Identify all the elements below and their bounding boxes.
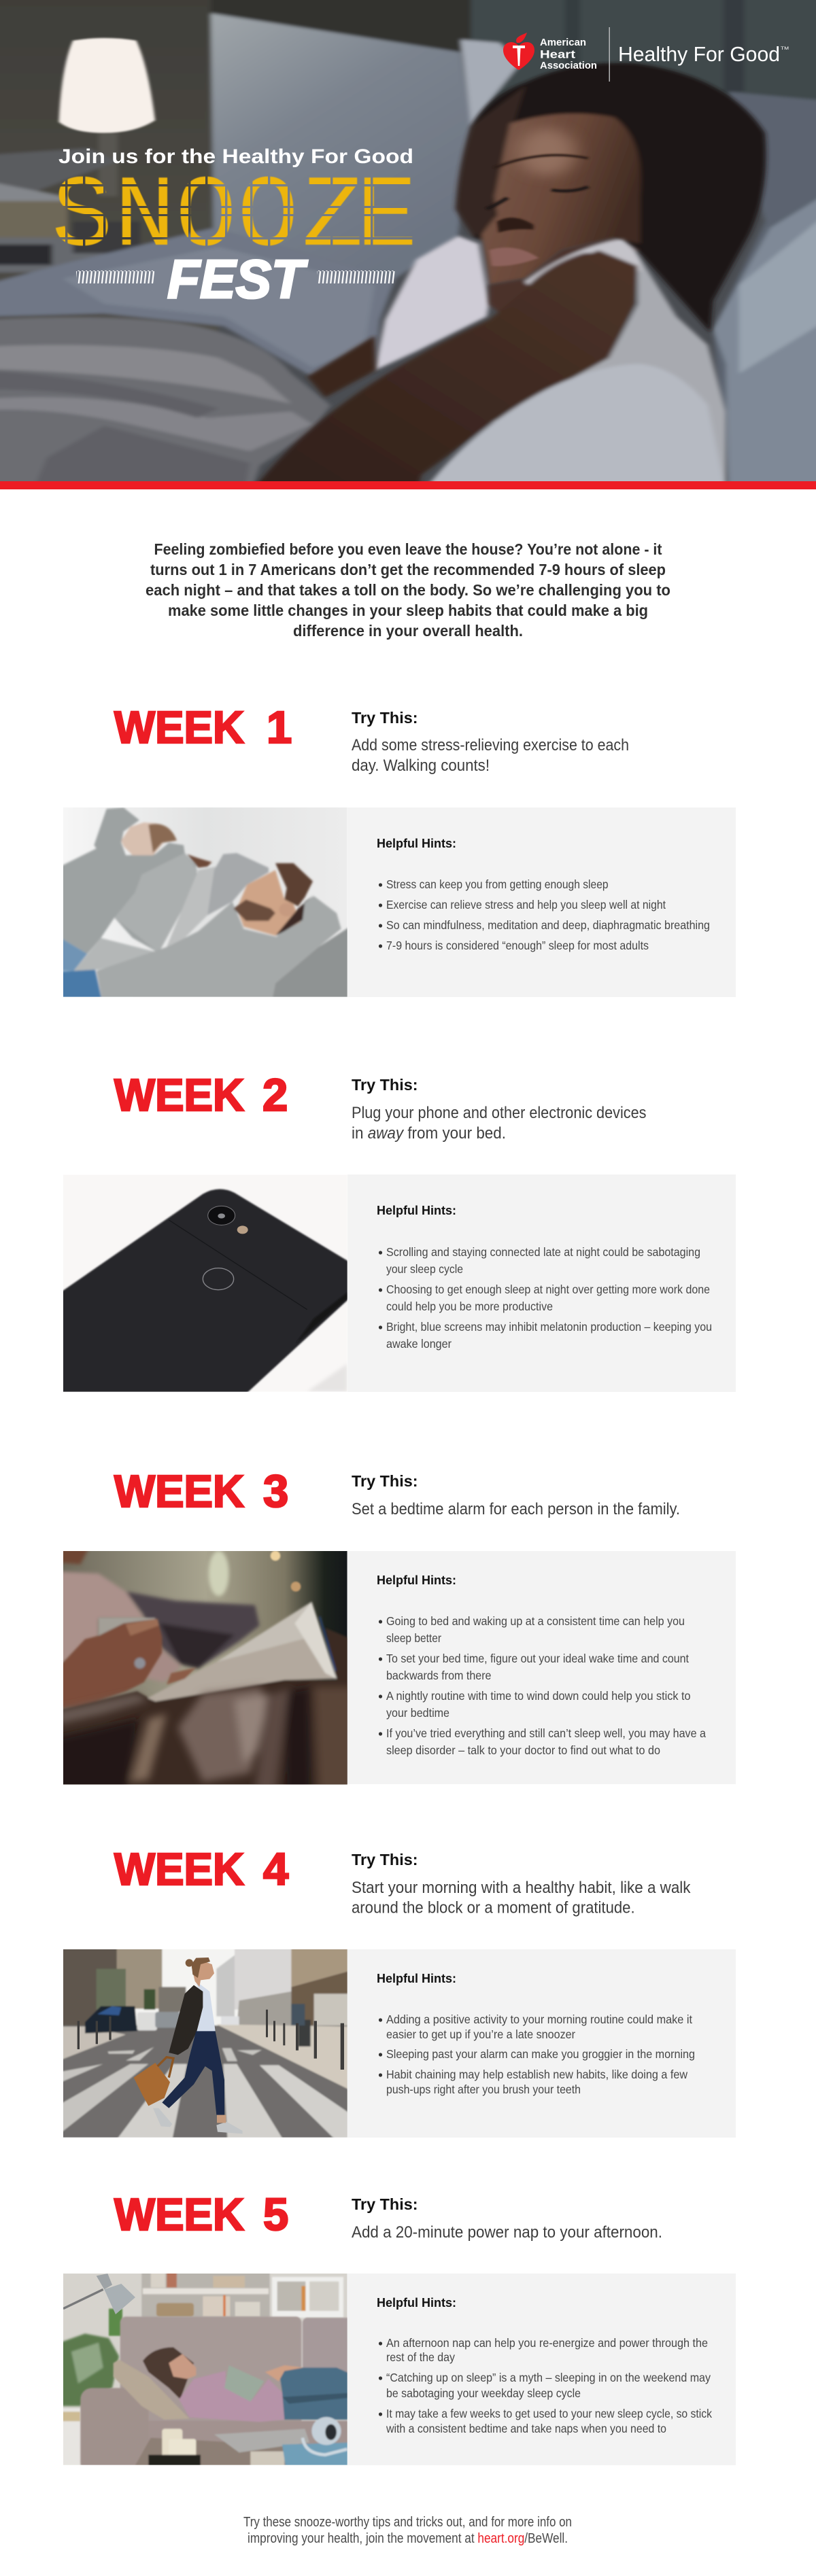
week 4 heading: WEEK: [114, 1844, 244, 1895]
hero banner: [0, 0, 816, 494]
tick bar left: [76, 271, 154, 283]
week 2 try this: in away from your bed.: [352, 1124, 506, 1143]
hero photo: woman sleeping in bed: [0, 0, 816, 494]
week 5 hints: [377, 2296, 712, 2435]
flash: [237, 1225, 248, 1234]
week 5 section: [53, 2189, 736, 2474]
week 3 section: [53, 1466, 736, 1793]
closing call to action: [243, 2515, 572, 2546]
week 2 heading: 2: [262, 1070, 288, 1121]
red band: [0, 481, 816, 489]
week 3 try this: Try This:: [352, 1472, 418, 1490]
week 4 try this: around the block or a moment of gratitude.: [352, 1899, 635, 1917]
week 5 photo: woman napping on a sofa: [63, 2274, 347, 2465]
week 2 hints: Scrolling and staying connected late at night could be sabotaging: [386, 1245, 700, 1259]
week 4 hints: Helpful Hints:: [377, 1972, 456, 1985]
week 4 photo: woman walking across a crosswalk: [63, 1949, 347, 2138]
intro paragraph: Feeling zombiefied before you even leave the house? You’re not alone - it: [154, 540, 662, 558]
week 5 hints panel: [347, 2274, 736, 2465]
week 3 hints: To set your bed time, figure out your ideal wake time and count: [386, 1652, 689, 1665]
week 1 hints: 7-9 hours is considered “enough” sleep for most adults: [386, 939, 649, 952]
tick bar right: [317, 271, 395, 283]
week 1 hints: Helpful Hints:: [377, 837, 456, 850]
camera: [208, 1206, 235, 1225]
week 4 section: [53, 1844, 736, 2148]
week 3 hints: sleep disorder – talk to your doctor to find out what to do: [386, 1743, 660, 1757]
week 3 hints panel: [347, 1551, 736, 1784]
week 5 try this: [352, 2195, 662, 2242]
week 1 try this: day. Walking counts!: [352, 756, 490, 775]
week 2 try this: [352, 1076, 646, 1143]
week 3 hints: A nightly routine with time to wind down could help you stick to: [386, 1689, 691, 1703]
week 2 hints: Bright, blue screens may inhibit melatonin production – keeping you: [386, 1320, 712, 1334]
closing call to action: Try these snooze-worthy tips and tricks out, and for more info on: [243, 2515, 572, 2530]
week 2 hints: could help you be more productive: [386, 1300, 553, 1313]
week 5 hints: “Catching up on sleep” is a myth – sleeping in on the weekend may: [386, 2371, 711, 2384]
week 3 hints: backwards from there: [386, 1669, 491, 1682]
week 3 hints: Going to bed and waking up at a consistent time can help you: [386, 1614, 685, 1628]
week 3 try this: Set a bedtime alarm for each person in the family.: [352, 1500, 680, 1518]
week 1 hints: Exercise can relieve stress and help you sleep well at night: [386, 898, 666, 911]
intro paragraph: turns out 1 in 7 Americans don’t get the recommended 7-9 hours of sleep: [150, 561, 666, 578]
SNOOZE clock-style title: SNOOZE: [52, 160, 418, 276]
week 3 photo: reading with a mug under a blanket: [63, 1551, 347, 1785]
week 5 heading: WEEK: [114, 2189, 244, 2240]
week 2 hints: your sleep cycle: [386, 1262, 463, 1276]
logo: Healthy For Good: TM: [781, 46, 789, 51]
intro paragraph: [146, 540, 670, 640]
FEST title: FEST: [167, 249, 308, 309]
week 5 hints: be sabotaging your weekday sleep cycle: [386, 2386, 581, 2400]
week 1 heading: 1: [267, 702, 292, 753]
week 3 hints: your bedtime: [386, 1706, 449, 1720]
hero headline: Join us for the Healthy For Good: [58, 145, 413, 168]
week 1 hints panel: [347, 807, 736, 997]
week 2 section: [49, 1070, 736, 1400]
week 3 try this: [352, 1472, 680, 1518]
week 5 try this: Try This:: [352, 2195, 418, 2213]
week 3 heading: WEEK: [114, 1466, 244, 1517]
week 2 hints: Helpful Hints:: [377, 1204, 456, 1217]
week 4 try this: Try This:: [352, 1851, 418, 1868]
week 3 hints: [377, 1573, 706, 1757]
week 5 heading: 5: [263, 2189, 288, 2240]
week 3 hints: If you’ve tried everything and still can’t sleep well, you may have a: [386, 1726, 706, 1740]
week 4 hints: Adding a positive activity to your morning routine could make it: [386, 2013, 692, 2026]
week 5 hints: rest of the day: [386, 2350, 455, 2364]
week 5 hints: Helpful Hints:: [377, 2296, 456, 2310]
week 4 hints: easier to get up if you’re a late snoozer: [386, 2027, 575, 2041]
intro paragraph: difference in your overall health.: [293, 622, 523, 640]
week 1 photo: couple relaxing on sofa: [63, 807, 347, 997]
logo: Healthy For Good: Healthy For Good: [618, 42, 780, 66]
logo: American Heart Association: [503, 33, 597, 71]
logo: American Heart Association: Association: [540, 60, 597, 71]
week 4 try this: [352, 1851, 691, 1917]
week 4 hints: push-ups right after you brush your teeth: [386, 2083, 581, 2096]
week 2 hints: [377, 1204, 712, 1351]
week 2 try this: Plug your phone and other electronic devices: [352, 1104, 646, 1122]
week 1 hints: So can mindfulness, meditation and deep, diaphragmatic breathing: [386, 918, 710, 932]
week 2 hints panel: [347, 1174, 736, 1392]
week 2 hints: awake longer: [386, 1337, 452, 1351]
week 2 photo: black smartphone: [63, 1174, 347, 1392]
week 1 try this: Add some stress-relieving exercise to each: [352, 736, 629, 754]
week 5 hints: It may take a few weeks to get used to your new sleep cycle, so stick: [386, 2407, 712, 2420]
week 4 hints: Sleeping past your alarm can make you groggier in the morning: [386, 2047, 695, 2061]
week 1 section: [53, 702, 736, 1006]
week 1 try this: [352, 709, 629, 775]
week 2 hints: Choosing to get enough sleep at night over getting more work done: [386, 1283, 710, 1296]
week 4 hints: Habit chaining may help establish new habits, like doing a few: [386, 2068, 687, 2081]
week 1 hints: Stress can keep you from getting enough sleep: [386, 877, 609, 891]
week 4 heading: 4: [263, 1844, 288, 1895]
week 2 heading: WEEK: [114, 1070, 244, 1121]
fingerprint sensor: [203, 1268, 234, 1290]
week 2 try this: Try This:: [352, 1076, 418, 1094]
logo: American Heart Association: American: [540, 37, 586, 48]
week 4 hints panel: [347, 1949, 736, 2138]
week 1 heading: WEEK: [114, 702, 244, 753]
week 5 hints: An afternoon nap can help you re-energize and power through the: [386, 2336, 708, 2350]
week 5 hints: with a consistent bedtime and take naps when you need to: [386, 2422, 666, 2435]
week 3 hints: sleep better: [386, 1631, 441, 1645]
logo divider: [609, 27, 610, 82]
closing call to action: improving your health, join the movement at heart.org/BeWell.: [248, 2531, 568, 2546]
logo: American Heart Association: Heart: [540, 48, 575, 61]
week 3 hints: Helpful Hints:: [377, 1573, 456, 1587]
week 1 try this: Try This:: [352, 709, 418, 727]
week 4 try this: Start your morning with a healthy habit, like a walk: [352, 1879, 691, 1897]
intro paragraph: each night – and that takes a toll on the body. So we’re challenging you to: [146, 581, 670, 599]
intro paragraph: make some little changes in your sleep habits that could make a big: [168, 602, 648, 619]
week 1 hints: [377, 837, 710, 952]
week 4 hints: [377, 1972, 695, 2096]
week 5 try this: Add a 20-minute power nap to your afternoon.: [352, 2223, 662, 2242]
week 3 heading: 3: [263, 1466, 288, 1517]
